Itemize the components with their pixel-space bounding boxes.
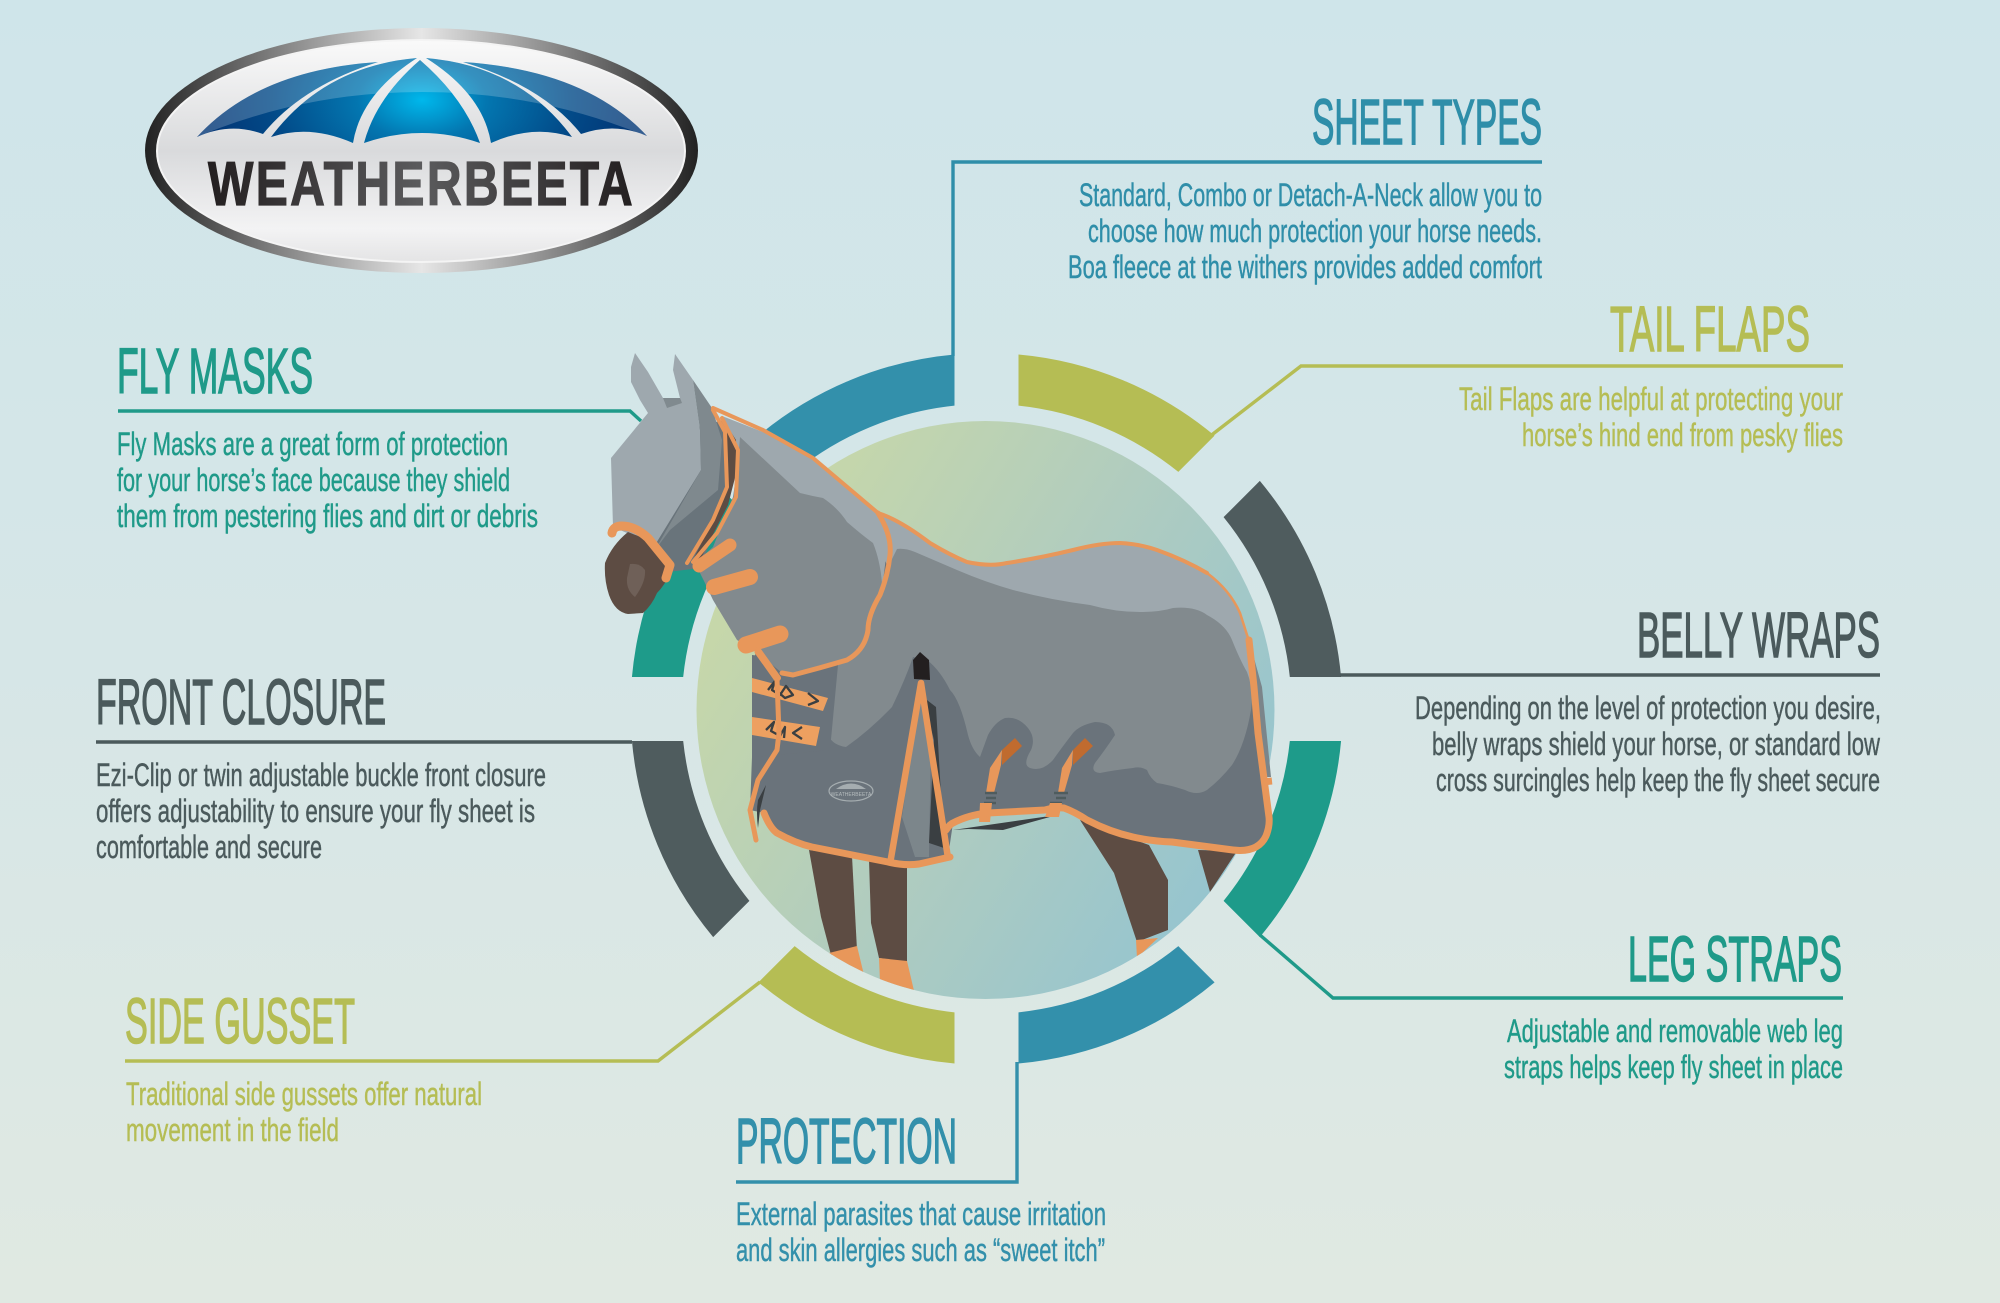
rug upper light panel (878, 513, 1254, 695)
text: sheet types description: Boa fleece at the withers provides added comfort (1068, 249, 1542, 285)
text: fly masks description: them from pestering flies and dirt or debris (117, 498, 538, 534)
leg straps (979, 738, 1093, 822)
neck hood main panel (695, 437, 882, 673)
ears and face of fly mask (611, 353, 701, 545)
leader line: belly wraps (1340, 673, 1880, 677)
panel: side gusset (125, 982, 760, 1148)
front closure orange edge (750, 652, 779, 840)
heading: sheet types: SHEET TYPES (1312, 86, 1542, 158)
ring segment: sheet types (758, 354, 954, 472)
ring segment: fly masks (632, 481, 749, 677)
logo: Weatherbeeta badge (145, 28, 698, 273)
panel: sheet types (953, 86, 1542, 356)
disc behind horse (696, 421, 1274, 999)
panel: protection (736, 1062, 1106, 1268)
text: belly wraps description (1415, 690, 1881, 798)
ring segment: leg straps (1224, 741, 1341, 937)
muzzle (605, 532, 670, 614)
hood orange edging (687, 408, 1248, 678)
text: front closure description: Ezi-Clip or twin adjustable buckle front closure (96, 757, 546, 793)
logo wordmark: WEATHERBEETA (208, 150, 635, 219)
rug logo (829, 781, 873, 801)
text: front closure description (96, 757, 546, 865)
text: sheet types description: Standard, Combo or Detach-A-Neck allow you to (1079, 177, 1542, 213)
text: protection description (736, 1196, 1106, 1268)
heading: tail flaps: TAIL FLAPS (1610, 293, 1810, 365)
text: tail flaps description: Tail Flaps are helpful at protecting your (1459, 381, 1843, 417)
text: sheet types description: choose how much protection your horse needs. (1088, 213, 1542, 249)
text: leg straps description: straps helps keep fly sheet in place (1504, 1049, 1843, 1085)
text: leg straps description: Adjustable and removable web leg (1507, 1013, 1843, 1049)
ring segment: protection (1018, 946, 1215, 1064)
icon: umbrella canopy (197, 58, 647, 143)
leader line: tail flaps (1209, 366, 1843, 437)
heading: side gusset: SIDE GUSSET (125, 985, 355, 1057)
under belly strip (953, 815, 1057, 830)
side gusset (890, 652, 948, 864)
horse wearing fly sheet (605, 353, 1272, 995)
text: leg straps description (1504, 1013, 1843, 1085)
leader line: fly masks (118, 411, 641, 421)
leader line: sheet types (953, 162, 1542, 356)
panel: leg straps (1260, 923, 1843, 1085)
text: fly masks description: Fly Masks are a great form of protection (117, 426, 508, 462)
text: protection description: and skin allergies such as “sweet itch” (736, 1232, 1105, 1268)
rug body dark base (750, 515, 1270, 863)
ring segment: front closure (632, 741, 749, 937)
leader line: front closure (96, 740, 632, 744)
gusset tip (913, 652, 930, 680)
text: side gusset description: movement in the field (126, 1112, 339, 1148)
text: fly masks description (117, 426, 538, 534)
panel: fly masks (117, 335, 641, 534)
text: tail flaps description (1459, 381, 1843, 453)
leader line: leg straps (1260, 935, 1843, 998)
text: side gusset description (126, 1076, 482, 1148)
text: tail flaps description: horse’s hind end from pesky flies (1522, 417, 1843, 453)
text: front closure description: comfortable and secure (96, 829, 322, 865)
chest straps with buckles (752, 678, 828, 746)
panel: belly wraps (1340, 599, 1881, 798)
chest area (752, 655, 838, 757)
horse legs (809, 820, 1237, 995)
ring segments (632, 354, 1341, 1064)
heading: fly masks: FLY MASKS (117, 335, 313, 407)
neck hood light panel (722, 416, 888, 590)
ring segment: side gusset (758, 946, 954, 1064)
heading: protection: PROTECTION (736, 1105, 957, 1177)
rug hem binding (764, 640, 1269, 865)
panel: front closure (96, 666, 632, 865)
text: protection description: External parasites that cause irritation (736, 1196, 1106, 1232)
ring segment: belly wraps (1224, 481, 1341, 677)
rug logo: WEATHERBEETA (831, 792, 872, 798)
rear edge panel (1249, 640, 1271, 777)
leader line: protection (736, 1062, 1017, 1182)
heading: front closure: FRONT CLOSURE (96, 666, 386, 738)
noseband (612, 526, 670, 578)
ring segment: tail flaps (1018, 354, 1215, 472)
text: fly masks description: for your horse’s face because they shield (117, 462, 510, 498)
leader line: side gusset (125, 982, 760, 1061)
text: sheet types description (1068, 177, 1542, 285)
text: side gusset description: Traditional side gussets offer natural (126, 1076, 482, 1112)
gusset orange binding (890, 683, 948, 864)
neck shadow filler (652, 420, 738, 572)
mane channel (692, 418, 737, 562)
panel: tail flaps (1209, 293, 1843, 453)
text: front closure description: offers adjustability to ensure your fly sheet is (96, 793, 535, 829)
rug main panel (826, 549, 1252, 793)
rear tab (1262, 781, 1272, 782)
